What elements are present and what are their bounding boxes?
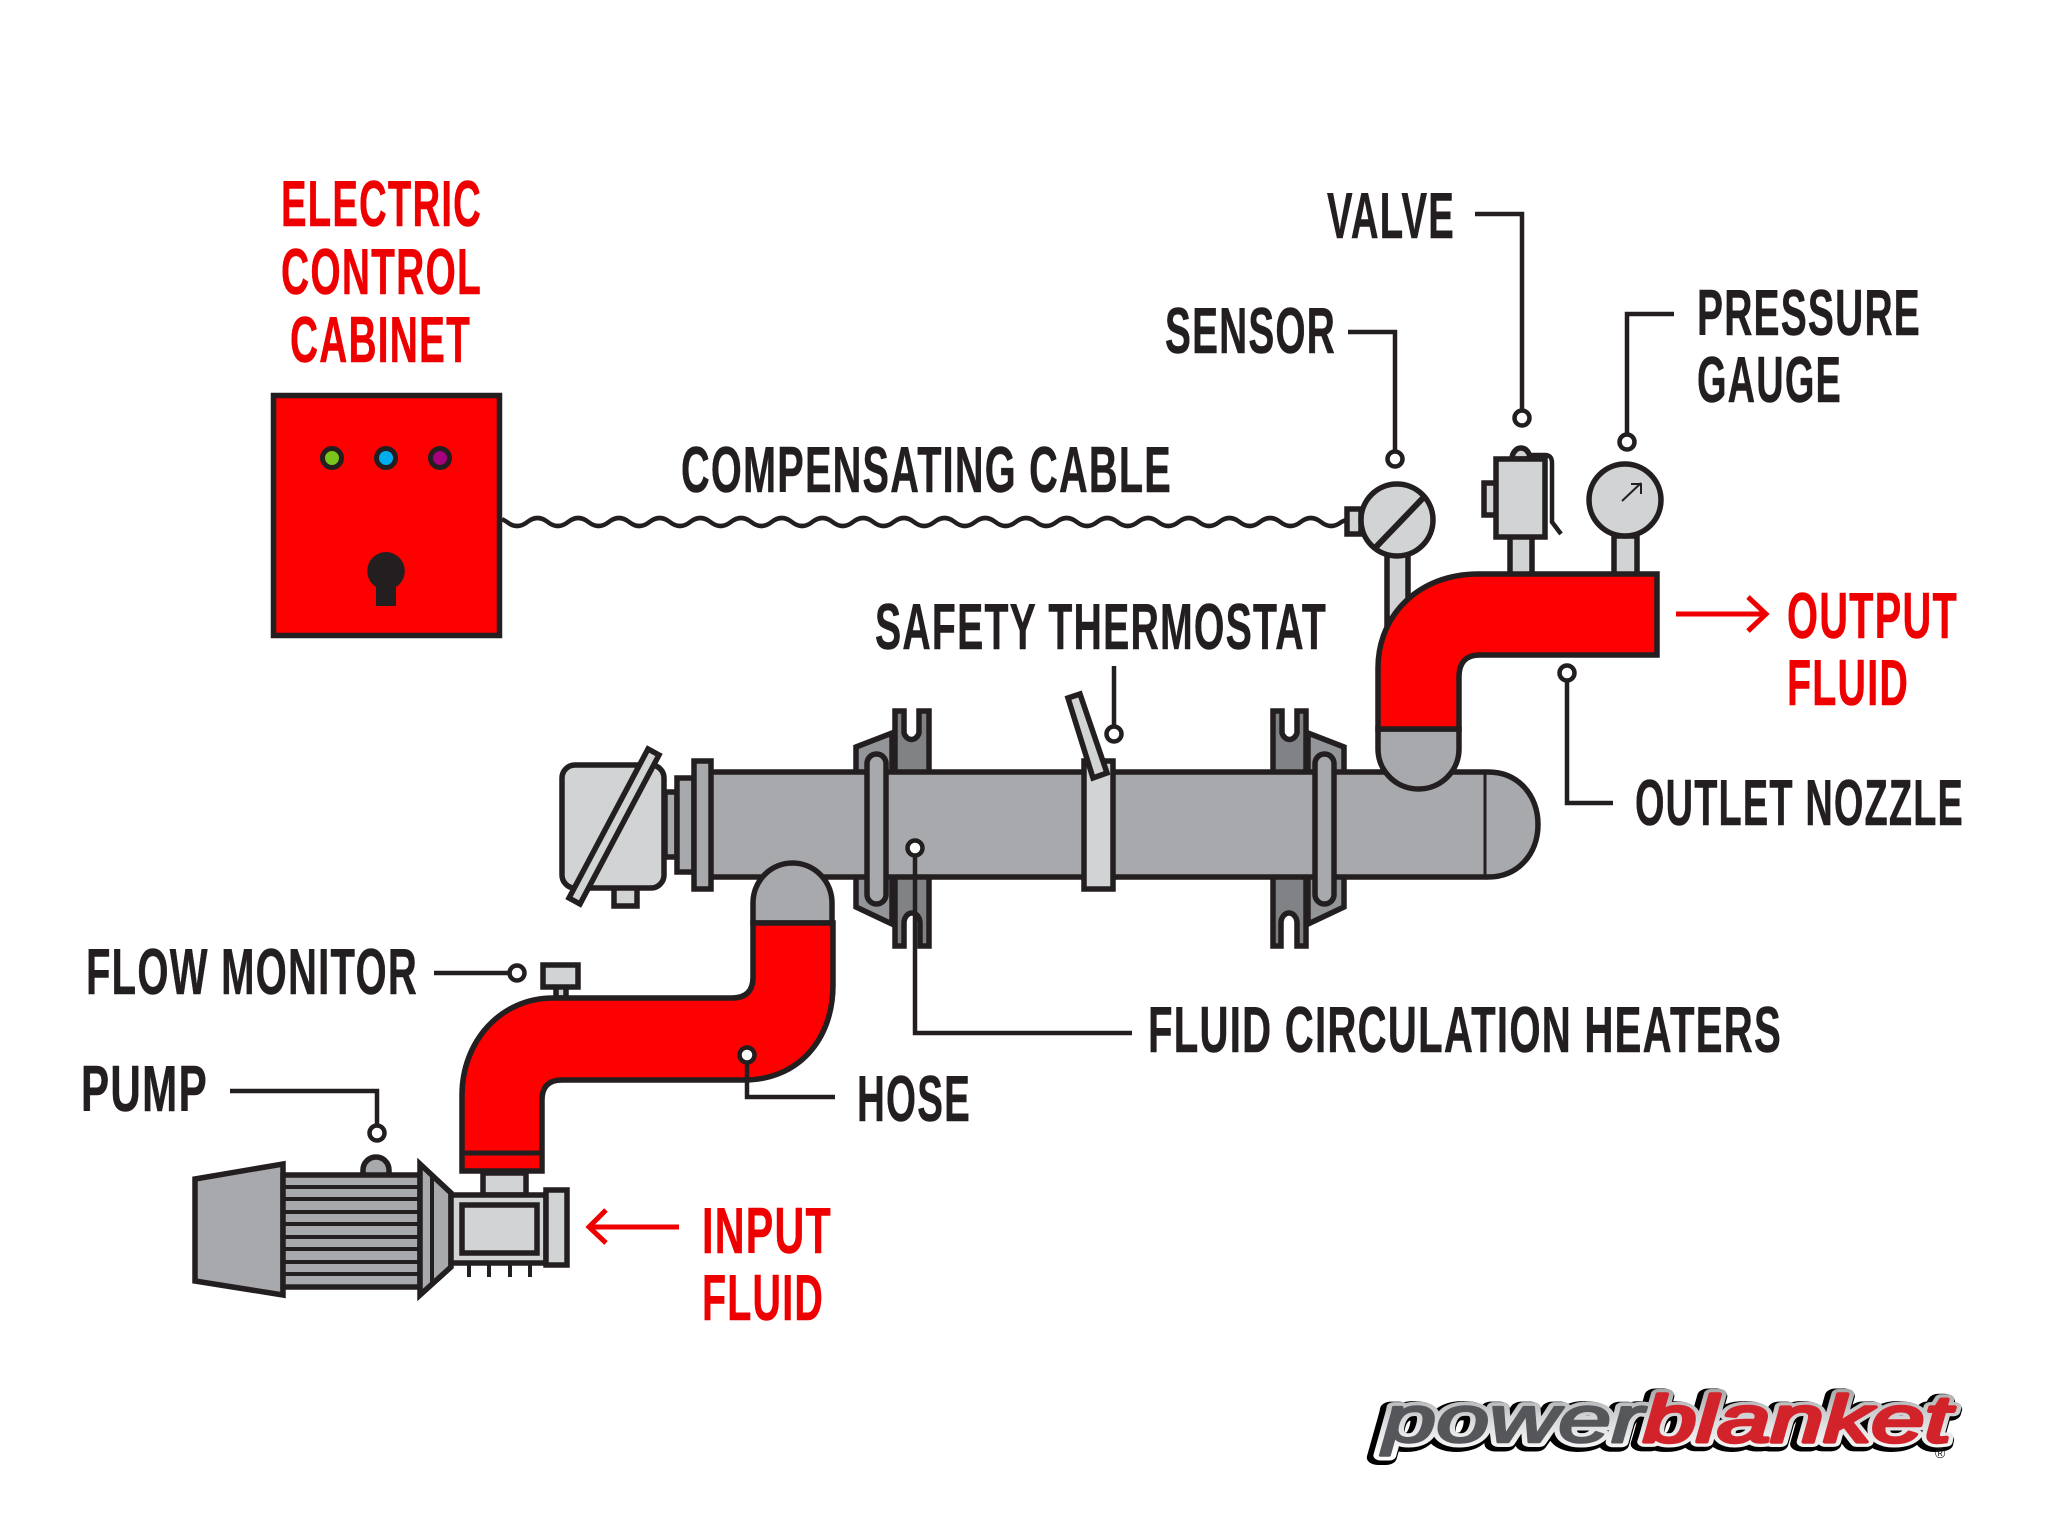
label: pressure gauge with leader (1620, 276, 1921, 450)
heater band left (867, 754, 886, 904)
input hose gray end (753, 863, 832, 923)
input hose (462, 923, 833, 1171)
label: flow monitor with leader: FLOW MONITOR (86, 935, 418, 1008)
output hose (1378, 574, 1657, 729)
heater pipe body (708, 772, 1538, 877)
right bracket plate (1308, 733, 1344, 924)
label: valve with leader: VALVE (1327, 179, 1455, 252)
logo: powerblanket: power blanket (1380, 1382, 1955, 1456)
pipe flanges (665, 761, 711, 889)
label: hose with leader: HOSE (857, 1062, 971, 1135)
label: input fluid with arrow: FLUID (702, 1261, 824, 1334)
terminal box diagonal strap (569, 749, 659, 904)
terminal box (562, 749, 664, 906)
label: valve with leader (1327, 179, 1530, 426)
pump motor housing (283, 1175, 420, 1287)
label: input fluid with arrow (589, 1194, 832, 1334)
panel: electric control cabinet (274, 396, 500, 636)
output hose gray end (1378, 729, 1459, 789)
label: safety thermostat with leader (875, 590, 1327, 742)
pump top dome (363, 1157, 389, 1176)
thermostat probe (1068, 694, 1107, 778)
pipe end cap seam (1484, 772, 1486, 877)
circulation heater brackets (856, 711, 1344, 946)
heading: electric control cabinet: CABINET (290, 303, 471, 376)
logo: powerblanket: powerblanket (1380, 1382, 1955, 1456)
label: output fluid with arrow (1676, 579, 1958, 719)
label: safety thermostat with leader: SAFETY THERMOSTAT (875, 590, 1327, 663)
left bracket bottom foot (895, 876, 929, 946)
motor fins (283, 1187, 420, 1274)
heading: electric control cabinet: CONTROL (281, 235, 482, 308)
label: hose with leader (740, 1048, 971, 1135)
right bracket bottom foot (1273, 876, 1306, 946)
label: sensor with leader (1165, 294, 1402, 466)
pump feet (469, 1262, 530, 1277)
label: sensor with leader: SENSOR (1165, 294, 1336, 367)
flow monitor device (543, 965, 578, 998)
thermostat band (1084, 761, 1113, 889)
left bracket top foot (895, 711, 929, 775)
pump body (451, 1195, 546, 1263)
label: compensating cable: COMPENSATING CABLE (681, 433, 1172, 506)
keyhole lock (367, 552, 405, 606)
label: input fluid with arrow: INPUT (702, 1194, 832, 1267)
label: outlet nozzle with leader (1560, 666, 1964, 839)
right bracket top foot (1273, 711, 1306, 775)
valve assembly (1484, 448, 1561, 575)
indicator light: blue (376, 448, 396, 468)
pump front flange (420, 1164, 451, 1295)
left bracket plate (856, 733, 892, 924)
label: pressure gauge with leader: GAUGE (1697, 343, 1842, 416)
pressure gauge assembly (1589, 464, 1661, 576)
label: pump with leader: PUMP (81, 1052, 208, 1125)
logo: powerblanket: powerblanket (1377, 1384, 1952, 1458)
compensating cable wire (502, 518, 1348, 526)
pump (195, 1157, 567, 1295)
pump right flange (546, 1190, 567, 1265)
pump outlet neck (483, 1173, 526, 1195)
logo: powerblanket: ® (1935, 1445, 1946, 1461)
heading: electric control cabinet: ELECTRIC (281, 167, 482, 240)
label: pump with leader (81, 1052, 384, 1140)
pump fan cover (195, 1164, 283, 1295)
label: fluid circulation heaters with leader (908, 840, 1782, 1066)
label: output fluid with arrow: FLUID (1787, 646, 1909, 719)
pump inner window (462, 1205, 537, 1253)
indicator light: green (322, 448, 342, 468)
sensor assembly (1347, 484, 1433, 628)
indicator light: magenta (430, 448, 450, 468)
heading: electric control cabinet (281, 167, 482, 376)
heater band right (1315, 754, 1334, 904)
